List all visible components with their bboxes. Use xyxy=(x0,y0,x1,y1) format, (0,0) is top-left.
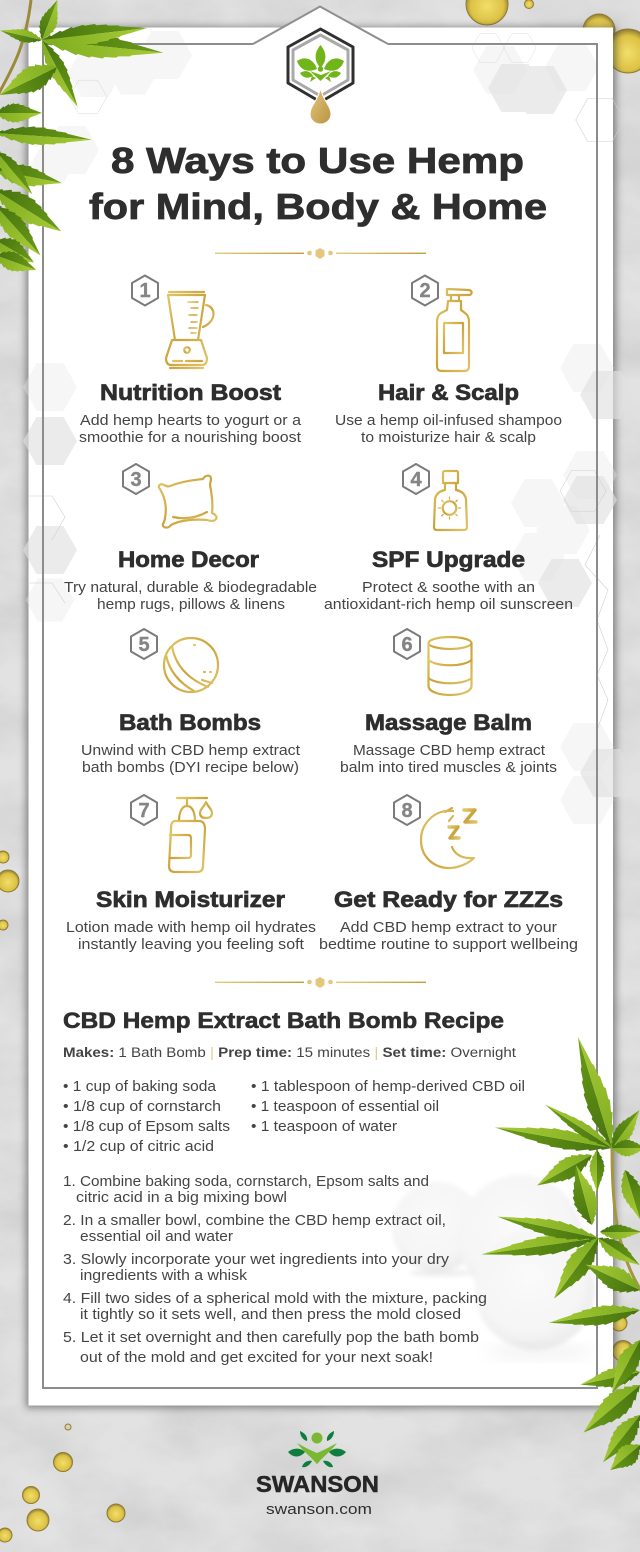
badge 7 xyxy=(131,795,157,825)
steps list: 2. In a smaller bowl, combine the CBD hemp extract oil, xyxy=(63,1213,446,1229)
ingredients list: • 1/2 cup of citric acid xyxy=(63,1139,214,1155)
brand name: SWANSON xyxy=(256,1471,379,1497)
icon: lotion pump with drop xyxy=(169,798,212,872)
description: to moisturize hair & scalp xyxy=(361,430,536,446)
badge 5 xyxy=(131,629,157,659)
description: Try natural, durable & biodegradable xyxy=(64,580,317,596)
heading: Hair & Scalp xyxy=(378,380,519,405)
ingredients list: • 1 teaspoon of water xyxy=(251,1119,397,1135)
item 4: SPF Upgrade xyxy=(324,464,573,613)
description xyxy=(66,920,316,953)
heading: Get Ready for ZZZs xyxy=(334,887,563,912)
description: hemp rugs, pillows & linens xyxy=(97,597,285,613)
recipe section xyxy=(63,1008,525,1366)
item 1: Nutrition Boost xyxy=(79,276,302,446)
description: bedtime routine to support wellbeing xyxy=(319,937,578,953)
description xyxy=(79,413,302,446)
item 6: Massage Balm xyxy=(340,629,557,776)
steps list: ingredients with a whisk xyxy=(80,1268,248,1284)
steps list: out of the mold and get excited for your next soak! xyxy=(80,1350,433,1366)
hemp plant top-left xyxy=(0,0,165,279)
ingredients list xyxy=(63,1079,525,1155)
description: Add CBD hemp extract to your xyxy=(340,920,557,936)
steps list: 4. Fill two sides of a spherical mold with the mixture, packing xyxy=(63,1291,487,1307)
description: Use a hemp oil-infused shampoo xyxy=(335,413,562,429)
description: balm into tired muscles & joints xyxy=(340,760,557,776)
badge 8: 8 xyxy=(401,800,413,822)
badge 1: 1 xyxy=(139,280,151,302)
badge 4 xyxy=(403,464,429,494)
description: bath bombs (DYI recipe below) xyxy=(82,760,299,776)
badge 3 xyxy=(123,464,149,494)
bath bomb photo xyxy=(392,1175,595,1359)
badge 2: 2 xyxy=(419,280,431,302)
item 5: Bath Bombs xyxy=(81,629,300,776)
description xyxy=(335,413,562,446)
heading: Massage Balm xyxy=(365,710,532,735)
icon: pillow xyxy=(159,476,217,528)
steps list: 3. Slowly incorporate your wet ingredients into your dry xyxy=(63,1252,450,1268)
description: Add hemp hearts to yogurt or a xyxy=(80,413,302,429)
steps list: 1. Combine baking soda, cornstarch, Epsom salts and xyxy=(63,1174,429,1190)
recipe heading: CBD Hemp Extract Bath Bomb Recipe xyxy=(63,1008,504,1033)
peak tab xyxy=(253,6,388,44)
description: Massage CBD hemp extract xyxy=(353,743,545,759)
icon: blender xyxy=(166,292,214,368)
item 8: Get Ready for ZZZs xyxy=(319,795,578,953)
icon: pump bottle xyxy=(437,289,472,371)
icon: bath bomb xyxy=(164,638,218,692)
badge 7: 7 xyxy=(138,800,150,822)
description: smoothie for a nourishing boost xyxy=(79,430,301,446)
steps list: citric acid in a big mixing bowl xyxy=(76,1190,287,1206)
badge 2 xyxy=(412,276,438,306)
divider xyxy=(215,977,426,988)
inner border xyxy=(43,44,597,1388)
divider xyxy=(215,248,426,259)
item 3: Home Decor xyxy=(64,464,317,613)
heading: Skin Moisturizer xyxy=(96,887,285,912)
ingredients list: • 1/8 cup of Epsom salts xyxy=(63,1119,230,1135)
recipe meta: Makes: 1 Bath Bomb | Prep time: 15 minutes | Set time: Overnight xyxy=(63,1045,516,1060)
ingredients list: • 1 tablespoon of hemp-derived CBD oil xyxy=(251,1079,525,1095)
description: antioxidant-rich hemp oil sunscreen xyxy=(324,597,573,613)
description: Lotion made with hemp oil hydrates xyxy=(66,920,316,936)
ingredients list: • 1/8 cup of cornstarch xyxy=(63,1099,221,1115)
badge 6 xyxy=(394,629,420,659)
description: Unwind with CBD hemp extract xyxy=(81,743,300,759)
description xyxy=(340,743,557,776)
badge 3: 3 xyxy=(130,469,142,491)
item 2: Hair & Scalp xyxy=(335,276,562,446)
logo mark xyxy=(288,1431,346,1467)
icon: moon with zzz xyxy=(421,808,476,868)
icon: balm jar xyxy=(428,637,472,695)
steps list xyxy=(63,1174,487,1366)
website: swanson.com xyxy=(266,1501,372,1518)
heading: Home Decor xyxy=(118,547,259,572)
badge 4: 4 xyxy=(410,469,422,491)
badge 1 xyxy=(132,276,158,306)
description xyxy=(81,743,300,776)
steps list: it tightly so it sets well, and then press the mold closed xyxy=(80,1307,461,1323)
description: instantly leaving you feeling soft xyxy=(78,937,304,953)
description xyxy=(319,920,578,953)
steps list: essential oil and water xyxy=(80,1229,233,1245)
heading: SPF Upgrade xyxy=(372,547,525,572)
title xyxy=(89,140,547,227)
footer logo xyxy=(256,1431,379,1518)
hexagon pattern decoration xyxy=(23,31,634,824)
badge 6: 6 xyxy=(401,634,413,656)
badge 8 xyxy=(394,795,420,825)
badge 5: 5 xyxy=(138,634,150,656)
item 7: Skin Moisturizer xyxy=(66,795,316,953)
ingredients list: • 1 cup of baking soda xyxy=(63,1079,217,1095)
title: for Mind, Body & Home xyxy=(89,186,547,227)
description xyxy=(64,580,317,613)
heading: Nutrition Boost xyxy=(100,380,282,405)
description xyxy=(324,580,573,613)
hemp plant bottom-right xyxy=(480,1034,640,1478)
title: 8 Ways to Use Hemp xyxy=(111,140,524,181)
ingredients list: • 1 teaspoon of essential oil xyxy=(251,1099,439,1115)
description: Protect & soothe with an xyxy=(362,580,535,596)
icon: sunscreen bottle xyxy=(434,471,467,530)
heading: Bath Bombs xyxy=(119,710,261,735)
steps list: 5. Let it set overnight and then carefully pop the bath bomb xyxy=(63,1330,479,1346)
icon: hexagon emblem with hemp leaf and oil drop xyxy=(288,29,353,124)
